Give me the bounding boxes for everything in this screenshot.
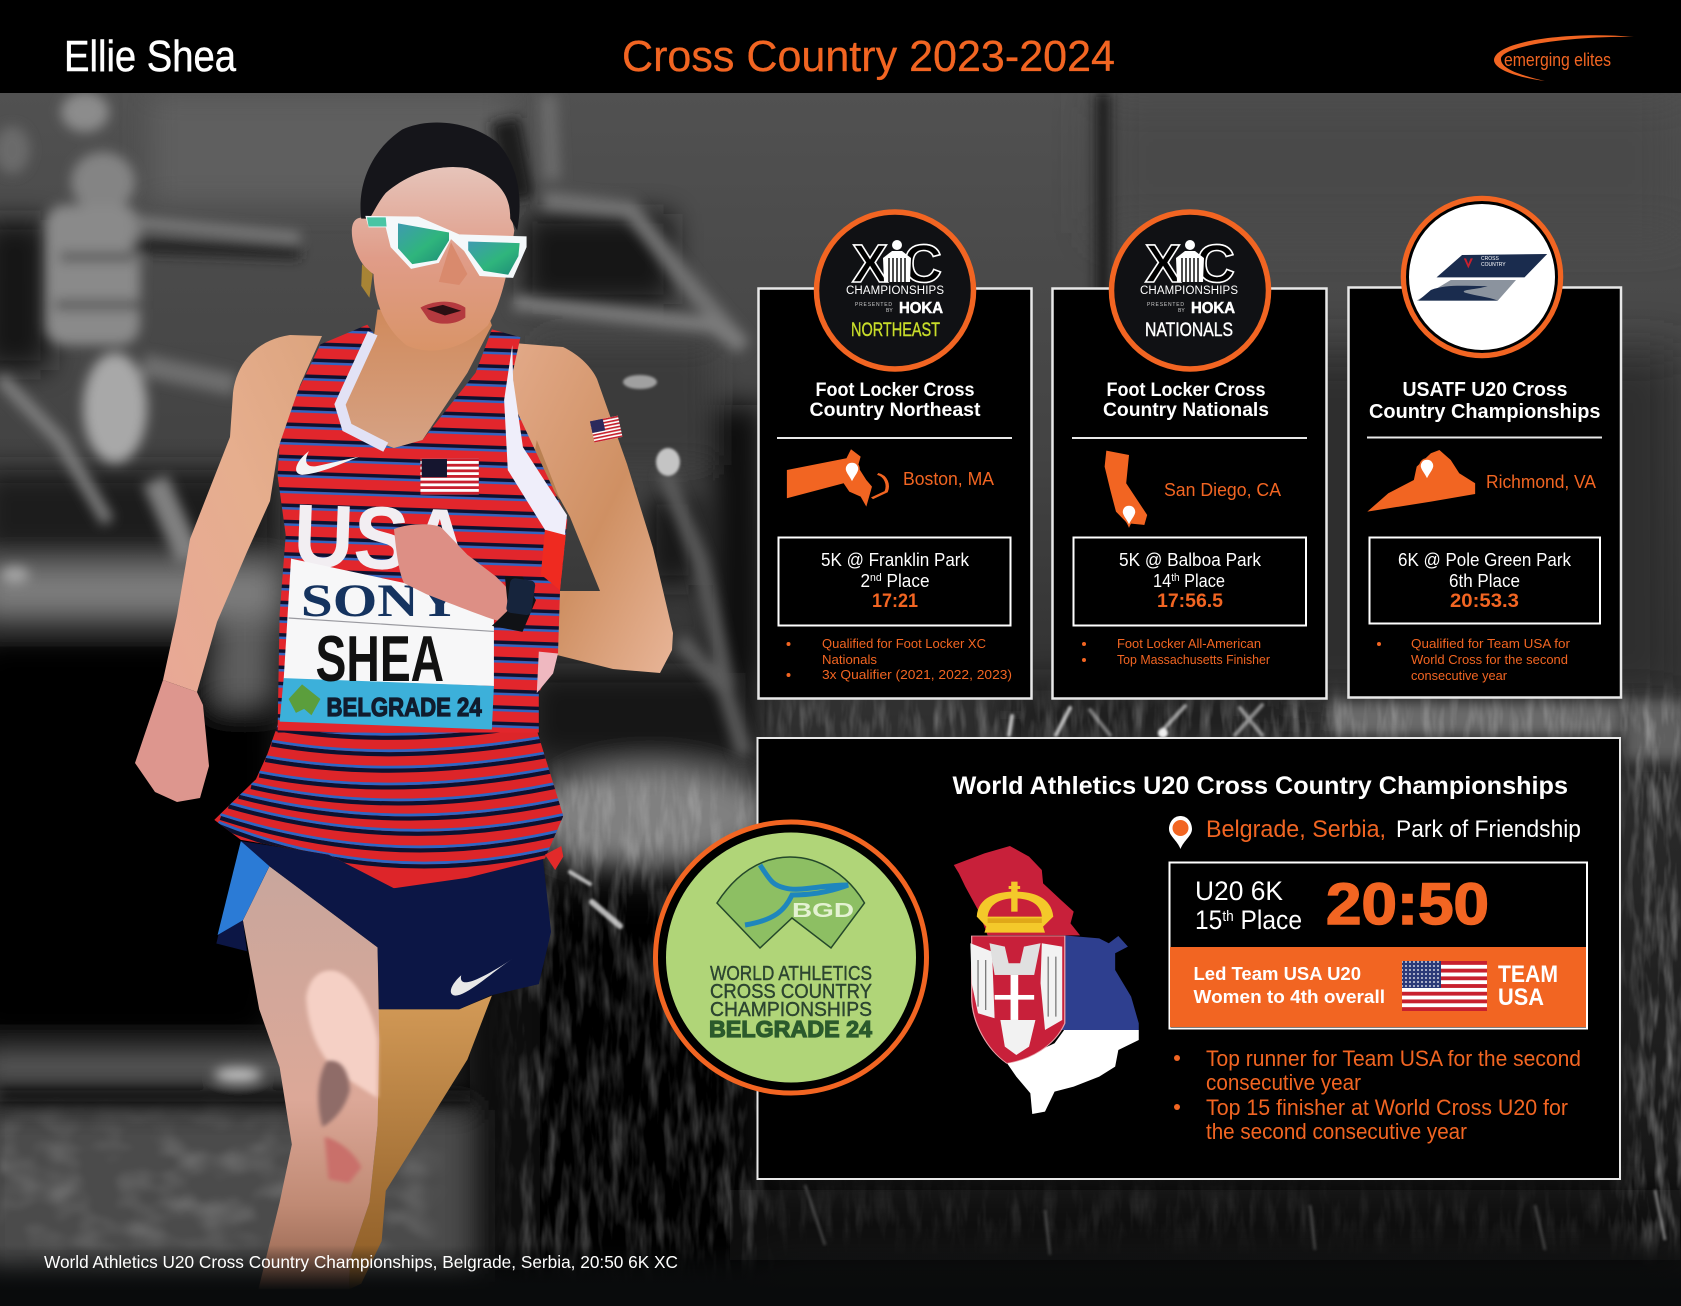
head and hair	[352, 167, 514, 351]
badge: XC Championships Northeast: X C	[852, 234, 942, 294]
badge: USATF Cross Country Championships	[1404, 198, 1560, 356]
result card: Place	[1234, 905, 1302, 935]
white side panel	[504, 345, 567, 535]
jersey flag	[420, 458, 479, 495]
viewer-right arm and forearm	[513, 343, 673, 673]
race bib: SHEA	[316, 623, 444, 696]
result card	[1170, 862, 1587, 1028]
result box: 5K @ Franklin Park	[821, 550, 970, 570]
location: San Diego, CA	[1164, 480, 1281, 500]
shoulder flag tattoo	[590, 416, 623, 443]
result box: 14	[1153, 571, 1173, 591]
athlete name: Ellie Shea	[64, 32, 236, 81]
achievements: Foot Locker All-American	[1117, 636, 1261, 651]
badge: XC Championships Nationals: X C	[1145, 234, 1235, 294]
crown	[977, 882, 1053, 933]
badge: World Athletics Belgrade 24: BELGRADE 24	[709, 1016, 872, 1042]
badge: XC Championships Northeast: NORTHEAST	[851, 320, 940, 341]
USA letters: USA	[292, 486, 471, 591]
achievements: 3x Qualifier (2021, 2022, 2023)	[822, 667, 1012, 682]
location: Richmond, VA	[1486, 472, 1596, 492]
bullet list	[1174, 1046, 1581, 1144]
panel: USATF U20	[1348, 198, 1621, 698]
result box	[1370, 538, 1600, 624]
runner photo cutout: Ellie Shea in USA kit	[135, 122, 673, 1289]
heading: USATF U20 Cross	[1402, 379, 1568, 401]
chest and neck	[341, 310, 492, 448]
panel: Foot Locker Nationals	[1052, 212, 1326, 698]
result card: Led Team USA U20	[1194, 964, 1361, 984]
badge: XC Championships Nationals: CHAMPIONSHIPS	[1140, 285, 1238, 297]
result card: 15	[1195, 905, 1225, 935]
result box: th	[1171, 572, 1180, 584]
result box: 6th Place	[1449, 571, 1520, 591]
badge: World Athletics Belgrade 24: CHAMPIONSHIPS	[710, 999, 872, 1021]
result card: th	[1222, 908, 1234, 925]
result box: 20:53.3	[1450, 591, 1519, 612]
badge: XC Championships Northeast: CHAMPIONSHIPS	[846, 285, 944, 297]
result box: 2	[860, 571, 871, 591]
achievements: Top Massachusetts Finisher	[1117, 652, 1271, 667]
icon: US flag	[1402, 961, 1487, 1011]
emerging elites logo	[1494, 35, 1634, 81]
heading	[810, 380, 981, 421]
achievements: Nationals	[822, 652, 878, 667]
World Athletics W logo: BGD	[792, 900, 854, 922]
result card: USA	[1498, 984, 1544, 1011]
badge: XC Championships Nationals: BY	[1178, 308, 1185, 314]
location pin	[1420, 459, 1434, 480]
badge: XC Championships Nationals: HOKA	[1191, 300, 1235, 317]
location	[1206, 816, 1581, 843]
bullet list: Top runner for Team USA for the second	[1206, 1046, 1581, 1071]
heading: Country Northeast	[810, 400, 981, 421]
location: Park of Friendship	[1396, 816, 1581, 843]
sunglasses	[365, 216, 527, 278]
achievements: Qualified for Team USA for	[1411, 636, 1571, 651]
badge: World Athletics Belgrade 24: WORLD ATHLETICS	[710, 963, 872, 985]
fist near hip	[135, 680, 209, 802]
badge: XC Championships Nationals	[1112, 212, 1268, 369]
bullet list: consecutive year	[1206, 1070, 1361, 1095]
badge: XC Championships Northeast: BY	[886, 308, 893, 314]
achievements: Qualified for Foot Locker XC	[822, 636, 986, 651]
achievements: consecutive year	[1411, 668, 1508, 683]
nose shadow	[439, 242, 467, 285]
badge: XC Championships Northeast: PRESENTED	[855, 302, 892, 308]
result box: Place	[1180, 571, 1225, 591]
heading: World Athletics U20 Cross Country Championships	[952, 772, 1568, 800]
smart watch	[492, 576, 536, 632]
map: Virginia	[1367, 450, 1475, 512]
badge: XC Championships Northeast	[816, 212, 974, 369]
white eagle	[970, 943, 1062, 1055]
badge: XC Championships Nationals: PRESENTED	[1147, 302, 1184, 308]
map: California	[1105, 451, 1147, 525]
location pin	[1169, 816, 1192, 849]
World Athletics W logo	[717, 857, 864, 948]
result box: 5K @ Balboa Park	[1119, 550, 1262, 570]
location: Boston, MA	[903, 469, 994, 489]
achievements	[1377, 636, 1571, 683]
result box: 17:21	[872, 591, 918, 612]
jersey with horizontal stripes	[271, 321, 574, 737]
result box: 17:56.5	[1157, 591, 1223, 612]
map: Massachusetts	[787, 449, 887, 507]
heading: Country Championships	[1369, 401, 1600, 423]
viewer-left arm	[163, 335, 322, 692]
result card: TEAM	[1498, 961, 1558, 988]
bullet list: Top 15 finisher at World Cross U20 for	[1206, 1095, 1568, 1120]
result box	[1074, 538, 1306, 626]
heading	[1369, 379, 1600, 423]
finishing time: 20:50	[1326, 872, 1489, 937]
emerging elites logo: emerging elites	[1504, 50, 1611, 70]
badge: World Athletics Belgrade 24: CROSS COUNTRY	[710, 981, 872, 1003]
heading	[1103, 380, 1269, 421]
badge: World Athletics Belgrade 24	[656, 822, 926, 1093]
achievements	[786, 636, 1012, 682]
heading: Foot Locker Cross	[1106, 380, 1266, 401]
heading: Country Nationals	[1103, 400, 1269, 421]
clenched hand	[394, 524, 509, 624]
lower body: legs, shorts and jersey hem	[210, 715, 569, 1289]
badge: XC Championships Northeast: HOKA	[899, 300, 943, 317]
collar	[340, 333, 386, 447]
achievements	[1082, 636, 1271, 667]
bottom dark strip	[0, 1290, 1681, 1306]
panel: Foot Locker Northeast	[758, 212, 1032, 698]
heading: Foot Locker Cross	[816, 380, 974, 401]
swoosh on jersey	[296, 451, 359, 475]
mouth	[420, 302, 465, 324]
result card: Women to 4th overall	[1194, 987, 1385, 1007]
location: Belgrade, Serbia,	[1206, 816, 1386, 843]
achievements: World Cross for the second	[1411, 652, 1568, 667]
map: Serbia flag and coat of arms	[954, 846, 1139, 1114]
race bib: SONY	[301, 576, 460, 627]
badge: XC Championships Nationals: NATIONALS	[1145, 320, 1233, 341]
result box: 6K @ Pole Green Park	[1398, 550, 1572, 570]
result box: nd	[870, 572, 882, 584]
result card: U20 6K	[1195, 876, 1283, 906]
bottom fade over photo	[0, 1245, 1681, 1291]
badge: USATF Cross Country Championships: COUNTRY	[1481, 262, 1506, 268]
result box: Place	[882, 571, 930, 591]
race bib	[280, 559, 494, 729]
location pin	[1122, 505, 1136, 526]
photo caption: World Athletics U20 Cross Country Championships, Belgrade, Serbia, 20:50 6K XC	[44, 1252, 678, 1272]
result box	[778, 538, 1010, 626]
pink pocket patch	[537, 652, 558, 693]
jersey hem with curved stripes	[210, 715, 569, 893]
page title: Cross Country 2023-2024	[622, 32, 1115, 81]
header bar	[0, 0, 1681, 93]
panel: World Athletics U20 Championships	[758, 738, 1620, 1179]
bullet list: the second consecutive year	[1206, 1119, 1467, 1144]
badge: USATF Cross Country Championships: CROSS	[1481, 256, 1499, 262]
race bib: BELGRADE 24	[327, 692, 482, 722]
location pin	[845, 462, 859, 483]
